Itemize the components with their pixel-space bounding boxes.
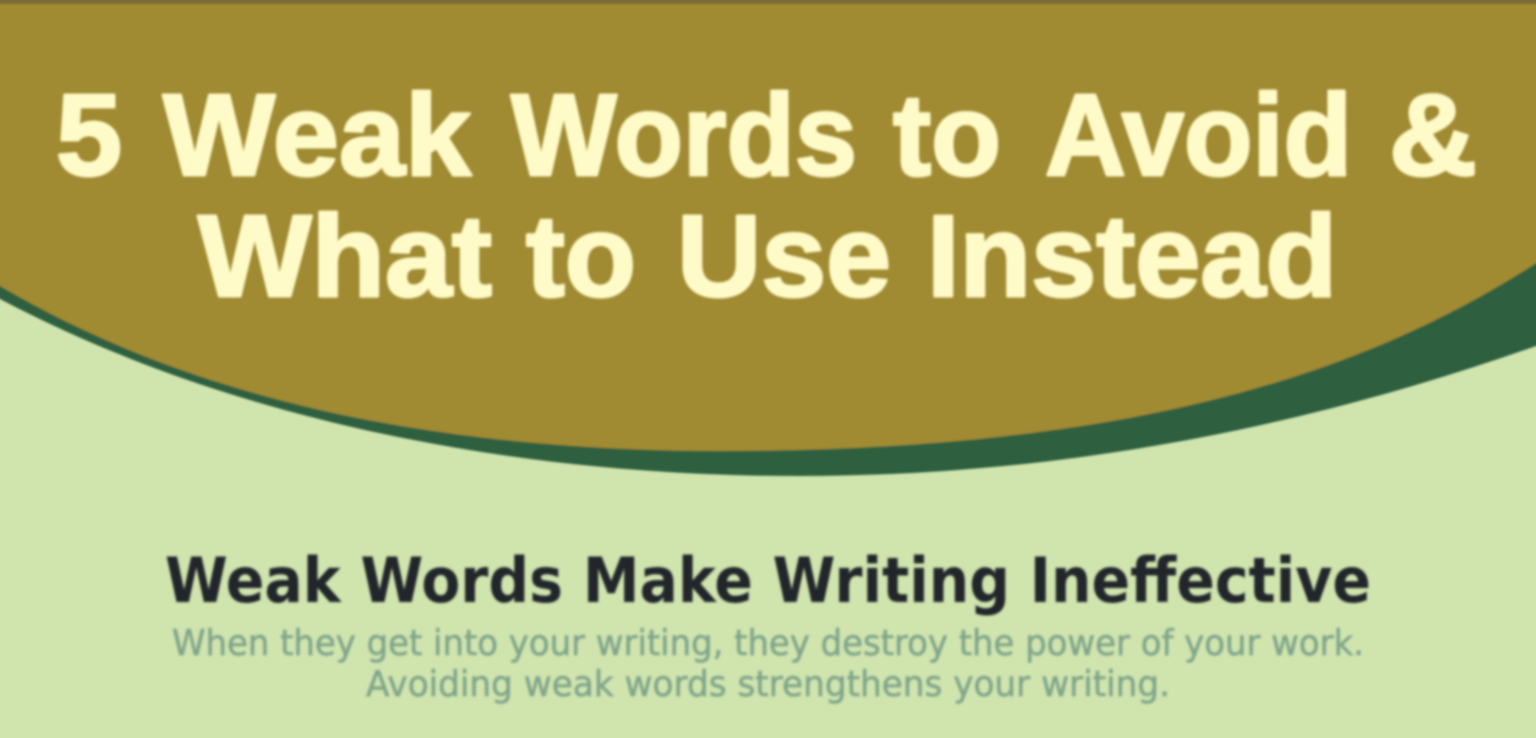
subheading: Weak Words Make Writing Ineffective	[165, 544, 1371, 617]
title: to	[893, 70, 1001, 200]
title: &	[1389, 70, 1477, 200]
title	[56, 70, 1477, 321]
title: Instead	[927, 191, 1337, 321]
title: 5	[56, 70, 122, 200]
header banner	[0, 0, 1536, 476]
description: When they get into your writing, they destroy the power of your work.	[172, 623, 1364, 664]
description: Avoiding weak words strengthens your writing.	[366, 664, 1170, 705]
title: to	[526, 191, 636, 321]
title: Use	[677, 191, 891, 321]
title: Avoid	[1045, 70, 1352, 200]
title: What	[198, 191, 492, 321]
title: Weak	[163, 70, 471, 200]
description	[172, 623, 1364, 705]
title: Words	[511, 70, 857, 200]
